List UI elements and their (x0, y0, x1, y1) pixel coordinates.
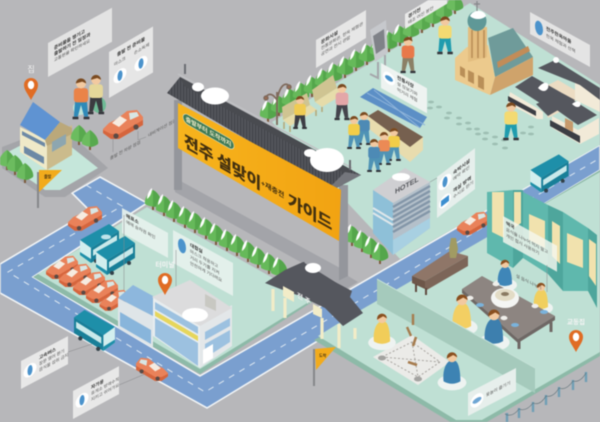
panel: hotel info: 숙박시설 (453, 157, 470, 177)
sign title: 설맞이 (217, 150, 261, 194)
hanok houses (508, 57, 600, 144)
car labels: 출발 전 차량 점검 (110, 139, 141, 162)
leader: hotel (430, 178, 437, 182)
icon: home pin: 집 (27, 64, 35, 74)
partition wall (377, 279, 535, 393)
church (455, 1, 533, 95)
game board (373, 314, 450, 385)
icon: terminal pin (155, 260, 175, 295)
panel: bus info: 음식물 섭취 금지 (39, 351, 68, 373)
sign board (178, 103, 341, 241)
car: large (103, 110, 143, 139)
folding screen (487, 190, 597, 308)
panel: yut game info (468, 368, 516, 416)
footprints (427, 101, 534, 149)
street lamp (264, 84, 291, 125)
panel: terminal: 매표소 (126, 212, 139, 226)
icon: restaurant pin (567, 317, 585, 352)
road network (0, 145, 600, 408)
person on bench (293, 96, 307, 129)
panel: photo spot: 태조 어진 봉안 (408, 4, 434, 26)
leader: car (119, 374, 145, 385)
trees: plaza edge (260, 0, 463, 122)
courtyard platform (314, 170, 600, 422)
leader: restaurant (546, 265, 548, 292)
panel: terminal (122, 208, 168, 258)
flag: arrival (313, 347, 336, 386)
icon: home pin (24, 64, 38, 100)
panel: holiday items: 손소독제 (134, 41, 149, 56)
panel: waiting room (173, 230, 233, 296)
car: road bottom (136, 358, 168, 381)
small label: table: 설 음식 나누기 (516, 272, 541, 292)
terminal building (118, 280, 232, 368)
sign roof (167, 64, 361, 190)
person: walking top (437, 16, 453, 54)
panel: culture centre: 문화시설 (321, 29, 338, 46)
low table with vase (412, 238, 468, 295)
person: walking hanok (503, 102, 519, 140)
panel: hanok village: 한복 체험과 산책 (546, 32, 575, 55)
panel: traditional market (381, 63, 427, 113)
panel: yut game info: 윷놀이 즐기기 (486, 379, 510, 399)
panel: hotel info: 예약 확인 (453, 164, 470, 183)
benches (282, 75, 342, 132)
fence (505, 372, 586, 422)
panel: holiday items (109, 26, 153, 98)
sign title (184, 131, 332, 234)
panel: photo spot (405, 0, 447, 29)
panel: traditional market: 설 장보기와 (397, 80, 417, 98)
panel: terminal: 예매 승차권 확인 (126, 218, 155, 241)
panel: waiting room: 마스크 착용하고 (190, 248, 218, 270)
hotel (373, 168, 430, 255)
dining table (462, 276, 555, 349)
panel: waiting room: 대합실 (190, 242, 203, 255)
sign title: +재충전 (261, 177, 284, 200)
panel: culture centre: 공연과 전시 관람 (321, 33, 351, 58)
parked buses (80, 224, 135, 275)
panel: culture centre (316, 10, 366, 68)
leader: bus (68, 344, 92, 352)
panel: restaurant info: 떡국 (506, 220, 515, 231)
flag: start (37, 170, 62, 208)
panel: travel tip: 준비물을 챙기고 (54, 28, 85, 52)
panel: restaurant info (503, 216, 557, 272)
trees: house garden (0, 125, 98, 183)
seated player: blue (438, 352, 466, 390)
panel: travel tip: 교통편을 확인하세요 (54, 37, 90, 64)
trees: plot edge (145, 188, 287, 279)
seated player: yellow (368, 314, 396, 350)
info board (370, 20, 388, 78)
panel: hanok village: 전주한옥마을 (546, 25, 572, 46)
trees: near hotel (344, 224, 388, 264)
panel: car info: 지키고 쉬어가요 (91, 381, 119, 403)
panel: hotel info: 객실 방역 (453, 174, 471, 195)
person: photographer (401, 37, 415, 73)
panel: car info (73, 366, 119, 419)
panel: hanok village (530, 12, 590, 67)
gate: 전 주 (297, 290, 311, 307)
hotel: HOTEL (395, 174, 419, 196)
icon: restaurant pin: 교동집 (567, 317, 585, 326)
panel: restaurant info: 음식을 나누어 먹지 말고 (506, 226, 548, 256)
car labels: 내비게이션 점검 (148, 117, 176, 139)
parking plot (33, 207, 312, 374)
bus: upper right (530, 154, 569, 193)
person reading (335, 84, 349, 120)
car: road right (457, 212, 489, 235)
flag: start: 출발 (44, 173, 52, 179)
panel: hotel info (437, 148, 475, 218)
house (20, 102, 72, 170)
sign posts (174, 100, 358, 290)
panel: car info: 자가용 (91, 378, 104, 391)
seated person: left (446, 295, 478, 336)
leaders: terminal (124, 215, 176, 290)
snow on sign (192, 82, 344, 172)
panel: travel tip (48, 8, 112, 77)
seated person: right (529, 283, 553, 314)
panel: hotel info: 수시로 환기 (453, 179, 473, 201)
seated person: top (493, 260, 517, 292)
bus: road (74, 310, 115, 351)
panel: photo spot: 경기전 (408, 6, 421, 20)
panel: holiday items: 출발 전 준비물 (117, 35, 145, 58)
seated person: front (478, 310, 510, 351)
panel: culture centre: 전통문화관, 한옥 체험관 (321, 20, 363, 52)
panel: bus info: 창문 열어 환기 (39, 347, 65, 367)
sign beam (175, 178, 340, 284)
sign title: 전주 (184, 131, 214, 167)
panel: waiting room: 안전하게 기다려요 (190, 260, 222, 284)
gate (265, 262, 363, 348)
car: road left (68, 206, 102, 231)
market stall (360, 88, 427, 162)
people queue (347, 112, 401, 172)
panel: traditional market: 전통시장 (397, 74, 414, 90)
panel: bus info: 고속버스 (39, 346, 56, 361)
panel: car info: 휴게소 방역수칙 (91, 375, 119, 397)
parked cars (46, 256, 128, 311)
panel: travel tip: 출발하기 전 일정과 (54, 31, 91, 58)
panel: holiday items: 마스크 (114, 55, 126, 68)
upper plaza (272, 3, 600, 259)
car labels (110, 117, 176, 162)
panel: bus info (21, 336, 68, 389)
panel: waiting room: 거리 두기를 지켜 (190, 254, 219, 276)
panel: traditional market: 먹거리 체험 (397, 86, 417, 104)
sign title: 가이드 (288, 190, 332, 234)
panel: restaurant info: 개인 접시 사용하기 (506, 232, 539, 257)
travellers (73, 75, 106, 119)
icon: terminal pin: 터미널 (155, 260, 175, 269)
house plot (2, 125, 108, 197)
sign pill: 출발부터 도착까지 (186, 114, 231, 149)
flag: arrival: 도착 (319, 352, 327, 358)
